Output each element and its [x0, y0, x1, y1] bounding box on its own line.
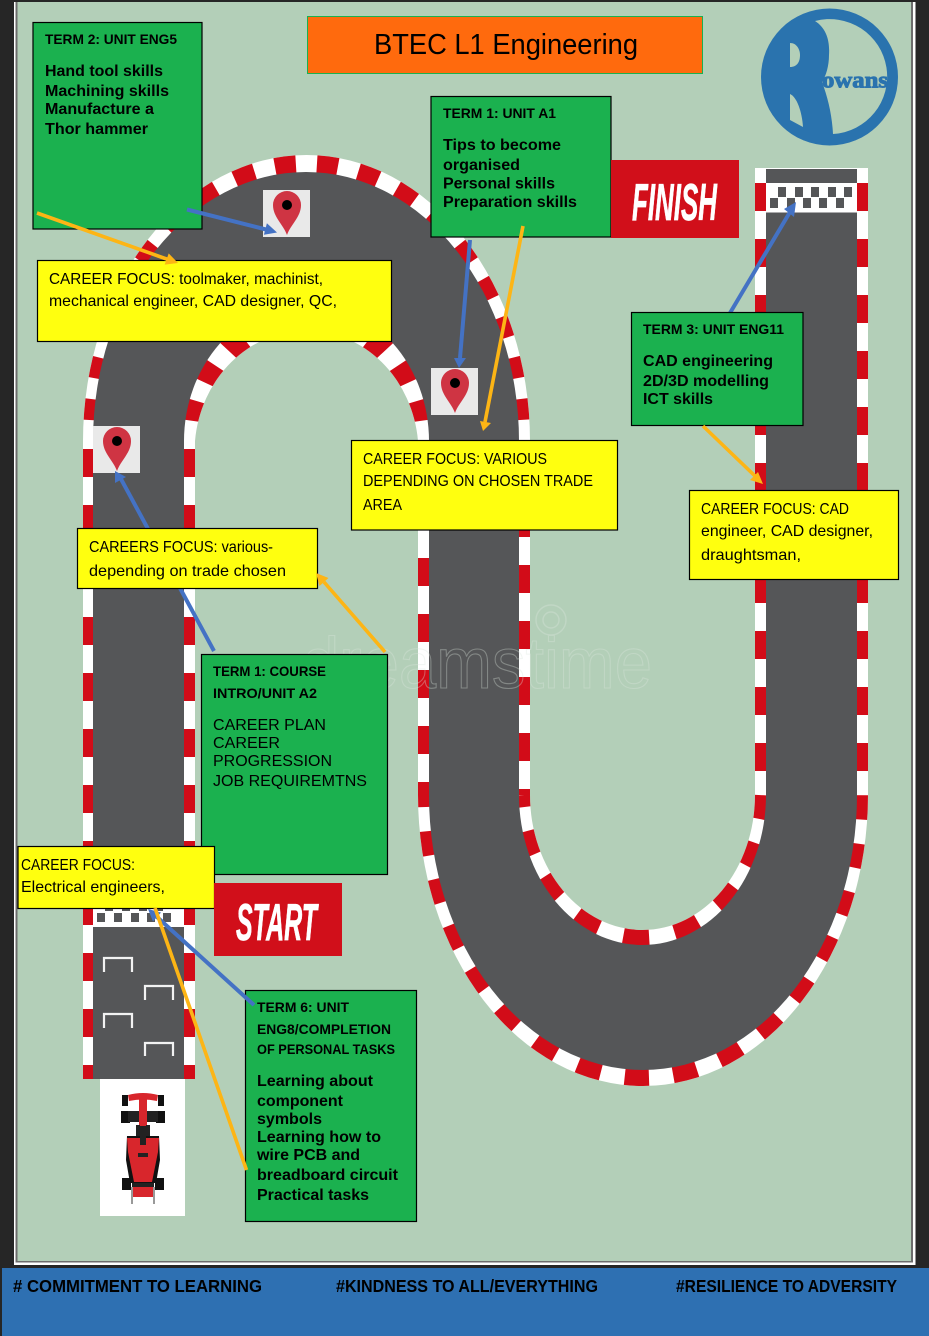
panel: term 2: Thor hammer [45, 121, 148, 138]
panel: career focus electrical [18, 846, 214, 908]
panel: term 1 unit A1: organised [443, 157, 520, 174]
start line checker [93, 905, 184, 927]
panel: term 6: ENG8/COMPLETION [257, 1021, 391, 1037]
panel: term 1 course intro: PROGRESSION [213, 753, 332, 770]
panel: term 2: Hand tool skills [45, 63, 163, 80]
panel: career focus various: CAREER FOCUS: VARIOUS [363, 451, 547, 468]
panel: term 1 course intro [202, 654, 388, 874]
panel: term 2: Machining skills [45, 83, 169, 100]
panel: term 1 course intro: CAREER [213, 735, 280, 752]
panel: term 6: component [257, 1093, 344, 1110]
finish sign [611, 160, 739, 238]
panel: term 1 unit A1: TERM 1: UNIT A1 [443, 105, 556, 121]
panel: career focus CAD: engineer, CAD designer, [701, 523, 873, 540]
footer banner: #KINDNESS TO ALL/EVERYTHING [336, 1276, 598, 1296]
arrow: course intro to pin [115, 471, 214, 651]
panel: term 1 course intro: JOB REQUIREMTNS [213, 773, 367, 790]
icon: Rowans logo: owans [822, 68, 888, 92]
panel: term 1 unit A1 [431, 96, 611, 237]
panel: term 3 [632, 312, 803, 426]
panel: career focus various: DEPENDING ON CHOSEN TRADE [363, 473, 593, 490]
panel: term 3: ICT skills [643, 391, 713, 408]
arrow: term 1 to pin [454, 240, 470, 368]
panel: career focus CAD: CAREER FOCUS: CAD [701, 501, 849, 518]
icon: map pin course intro [93, 426, 140, 473]
panel: career focus CAD [690, 490, 898, 580]
panel: career focus various [352, 440, 618, 530]
footer banner: # COMMITMENT TO LEARNING [13, 1276, 262, 1296]
panel: term 3: TERM 3: UNIT ENG11 [643, 321, 784, 337]
panel: term 6: wire PCB and [256, 1147, 360, 1164]
panel: career focus toolmaker: CAREER FOCUS: toolmaker, machinist, [49, 271, 323, 288]
race track [83, 155, 868, 1086]
panel: term 1 unit A1: Tips to become [443, 137, 561, 154]
panel: term 6: breadboard circuit [257, 1167, 399, 1184]
arrow: term 3 to finish [730, 202, 796, 313]
panel: term 1 course intro: INTRO/UNIT A2 [213, 685, 317, 701]
arrow: term 6 to career focus [155, 908, 246, 1170]
arrow: term 1 to career focus [480, 226, 523, 431]
start sign: START [236, 894, 319, 952]
watermark: dreamstime [302, 624, 652, 704]
arrow: term 6 to start line [148, 909, 254, 1005]
panel: term 2 [33, 22, 202, 229]
panel: term 6: Learning about [257, 1073, 374, 1090]
panel: term 1 unit A1: Personal skills [443, 176, 555, 192]
starting grid marks [104, 958, 173, 1056]
icon: racing car [100, 1079, 185, 1216]
arrow: term 3 to career focus [703, 426, 763, 484]
panel: careers focus various [78, 528, 318, 588]
panel: career focus toolmaker [38, 260, 392, 342]
panel: term 3: CAD engineering [643, 353, 773, 370]
panel: term 2: TERM 2: UNIT ENG5 [45, 31, 177, 47]
panel: term 6: Practical tasks [257, 1187, 369, 1204]
panel: careers focus various: depending on trade chosen [89, 563, 286, 580]
arrow: term 2 to pin [187, 210, 277, 235]
panel: term 3: 2D/3D modelling [643, 373, 769, 390]
panel: career focus various: AREA [363, 497, 402, 514]
panel: career focus toolmaker: mechanical engineer, CAD designer, QC, [49, 293, 337, 310]
panel: term 6: OF PERSONAL TASKS [257, 1041, 395, 1057]
footer banner [2, 1268, 929, 1336]
panel: term 6: Learning how to [257, 1129, 381, 1146]
panel: term 1 course intro: TERM 1: COURSE [213, 663, 326, 679]
panel: term 2: Manufacture a [45, 101, 154, 118]
title [308, 16, 702, 74]
arrow: course intro to career focus [316, 573, 385, 652]
panel: term 6: TERM 6: UNIT [257, 999, 349, 1015]
icon: map pin term 1 [431, 368, 478, 415]
footer banner: #RESILIENCE TO ADVERSITY [676, 1276, 897, 1296]
panel: career focus electrical: CAREER FOCUS: [21, 857, 135, 874]
finish sign: FINISH [632, 174, 718, 232]
start sign [214, 883, 342, 956]
panel: term 1 course intro: CAREER PLAN [213, 717, 326, 734]
icon: map pin term 2 [263, 190, 310, 237]
arrow: term 2 to career focus [37, 213, 178, 265]
panel: career focus CAD: draughtsman, [701, 547, 801, 564]
icon: Rowans logo [761, 8, 898, 146]
panel: career focus electrical: Electrical engineers, [21, 879, 165, 896]
panel: term 6 [246, 990, 416, 1222]
panel: careers focus various: CAREERS FOCUS: various- [89, 539, 273, 556]
panel: term 1 unit A1: Preparation skills [443, 194, 577, 211]
panel: term 6: symbols [257, 1111, 322, 1128]
title: BTEC L1 Engineering [374, 29, 638, 61]
finish line checker [766, 183, 857, 212]
